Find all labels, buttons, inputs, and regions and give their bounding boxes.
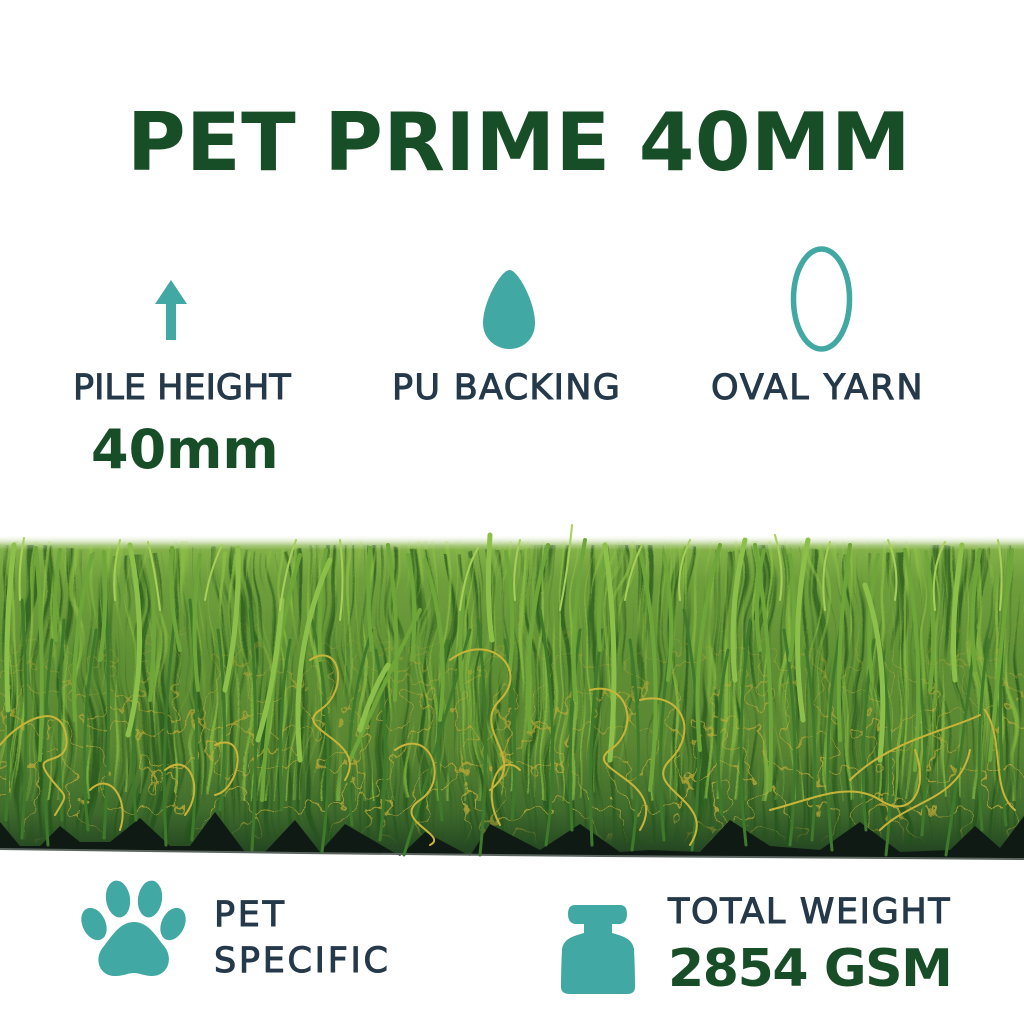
label: pet specific	[214, 895, 391, 981]
label: oval yarn: OVAL YARN	[711, 368, 924, 408]
label: pet specific: PET	[214, 895, 287, 935]
label: pile height: PILE HEIGHT	[73, 368, 291, 408]
bright blades	[7, 535, 962, 760]
icon: weight	[561, 905, 635, 994]
dark backing with tuft gaps	[0, 812, 1024, 859]
grass image	[0, 524, 1024, 860]
grass mat	[0, 525, 1024, 859]
icon: up arrow	[155, 280, 187, 340]
value: 2854 gsm: 2854 GSM	[668, 939, 952, 999]
fine tips	[20, 525, 1002, 620]
value: 40mm: 40mm	[91, 418, 279, 481]
icon: droplet	[483, 270, 535, 349]
label: pet specific: SPECIFIC	[214, 941, 391, 981]
label: total weight: TOTAL WEIGHT	[668, 892, 951, 932]
title: PET PRIME 40MM	[127, 96, 911, 189]
yellow curls	[0, 649, 1015, 845]
icon: oval ring	[790, 246, 852, 352]
icon: paw	[81, 880, 186, 976]
deep blades	[4, 600, 1006, 855]
label: pu backing: PU BACKING	[392, 368, 621, 408]
mid blades	[36, 540, 1012, 800]
